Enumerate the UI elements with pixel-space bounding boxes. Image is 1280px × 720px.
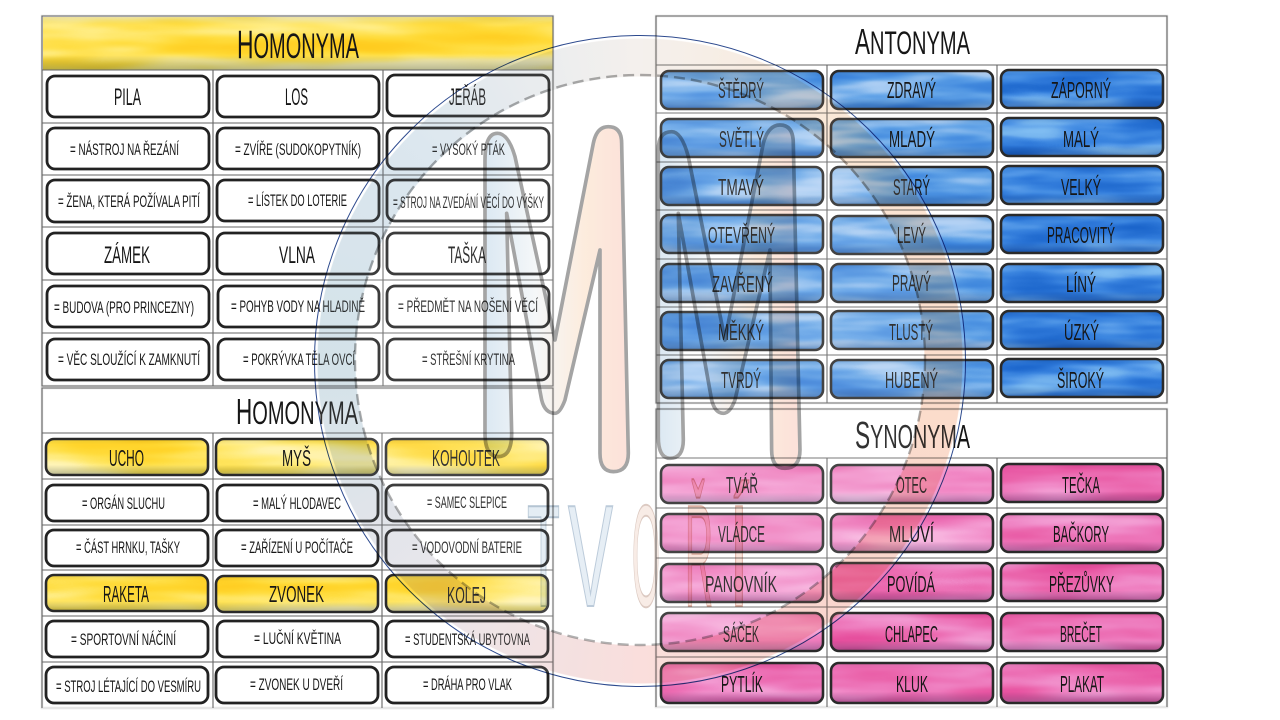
dashed inner ring — [355, 75, 925, 645]
cell: CHLAPEC: CHLAPEC — [885, 621, 938, 647]
cell: samec slepice: = SAMEC SLEPICE — [427, 493, 507, 512]
cell: ZVONEK: ZVONEK — [269, 581, 324, 607]
cell: vodovodní baterie: = VODOVODNÍ BATERIE — [412, 538, 522, 557]
cell: HUBENÝ — [831, 360, 993, 398]
cell: ZVONEK — [216, 576, 378, 612]
cell: střešní krytina: = STŘEŠNÍ KRYTINA — [422, 350, 515, 369]
logo letter M, right — [658, 125, 800, 468]
cell: ÚZKÝ — [1001, 311, 1163, 349]
cell: malý hlodavec — [217, 485, 378, 521]
cell: BAČKORY: BAČKORY — [1053, 520, 1109, 547]
cell: LOS — [217, 76, 379, 117]
cell: LÍNÝ — [1001, 264, 1163, 302]
cell: MYŠ: MYŠ — [282, 444, 311, 471]
header band: yellow watercolor — [43, 17, 553, 70]
logo word: TVOŘÍ: O — [632, 475, 660, 637]
cell: ŠTĚDRÝ: ŠTĚDRÝ — [718, 76, 764, 103]
cell: luční květina: = LUČNÍ KVĚTINA — [254, 629, 341, 648]
cell: zvíře: = ZVÍŘE (SUDOKOPYTNÍK) — [235, 140, 361, 159]
cell: MYŠ — [216, 439, 378, 475]
cell: KOHOUTEK: KOHOUTEK — [432, 445, 500, 471]
cell: TVRDÝ — [661, 360, 823, 398]
cell: OTEVŘENÝ: OTEVŘENÝ — [708, 222, 775, 248]
cell: OTEC — [831, 465, 993, 503]
cell: VELKÝ — [1001, 166, 1163, 204]
cell: luční květina — [217, 621, 378, 657]
cell: MLUVÍ: MLUVÍ — [889, 521, 934, 547]
logo word: TVOŘÍ: Í — [729, 475, 749, 637]
cell: budova — [47, 286, 209, 327]
cell: PILA: PILA — [114, 84, 141, 111]
cell: pokrývka: = POKRÝVKA TĚLA OVCÍ — [243, 350, 355, 369]
cell: dráha pro vlak: = DRÁHA PRO VLAK — [423, 675, 512, 694]
cell: ŠIROKÝ — [1001, 359, 1163, 397]
cell: stroj létající — [46, 667, 208, 703]
cell: lístek: = LÍSTEK DO LOTERIE — [248, 191, 347, 210]
cell: pohyb vody: = POHYB VODY NA HLADINĚ — [231, 297, 365, 316]
cell: vodovodní baterie — [386, 530, 548, 566]
cell: sportovní náčiní — [46, 621, 208, 657]
cell: část hrnku: = ČÁST HRNKU, TAŠKY — [76, 538, 180, 557]
cell: STARÝ: STARÝ — [893, 174, 930, 200]
panel: Antonyma — [656, 16, 1167, 403]
cell: část hrnku — [46, 530, 208, 566]
logo word: TVOŘÍ: Ř — [685, 475, 713, 637]
cell: MALÝ — [1001, 118, 1163, 156]
cell: ZDRAVÝ: ZDRAVÝ — [887, 77, 936, 103]
cell: VLNA: VLNA — [279, 242, 315, 269]
cell: TVÁŘ: TVÁŘ — [726, 472, 758, 498]
cell: TVÁŘ — [661, 465, 823, 503]
panel: Homonyma 1 — [42, 16, 553, 386]
outer circle outline — [314, 36, 966, 686]
cell: PLAKAT — [1001, 663, 1163, 703]
cell: lístek — [217, 180, 379, 221]
cell: ZAVŘENÝ: ZAVŘENÝ — [712, 271, 773, 297]
cell: ZDRAVÝ — [831, 71, 993, 109]
cell: věc sloužící — [47, 339, 209, 380]
cell: LEVÝ: LEVÝ — [897, 222, 926, 248]
cell: zvíře — [217, 128, 379, 169]
cell: zvonek u dveří — [216, 667, 378, 703]
logo word: TVOŘÍ: V — [568, 475, 613, 637]
cell: PRAVÝ: PRAVÝ — [892, 270, 931, 296]
cell: ŠTĚDRÝ — [661, 71, 823, 109]
cell: TAŠKA — [387, 233, 549, 274]
cell: vysoký pták: = VYSOKÝ PTÁK — [432, 140, 505, 159]
cell: TAŠKA: TAŠKA — [448, 241, 486, 269]
cell: stroj na zvedání — [387, 180, 549, 221]
cell: PYTLÍK — [661, 663, 823, 703]
heading: Homonyma: HOMONYMA — [237, 23, 359, 67]
cell: BREČET: BREČET — [1060, 620, 1102, 647]
cell: TVRDÝ: TVRDÝ — [721, 367, 761, 393]
cell: studentská ubytovna — [386, 621, 548, 657]
cell: MLADÝ — [831, 119, 993, 157]
cell: PANOVNÍK — [661, 564, 823, 602]
cell: střešní krytina — [387, 339, 549, 380]
cell: POVÍDÁ: POVÍDÁ — [887, 571, 935, 597]
cell: KOLEJ: KOLEJ — [447, 582, 486, 608]
cell: dráha pro vlak — [386, 667, 548, 703]
cell: PŘEZŮVKY — [1001, 563, 1163, 601]
cell: STARÝ — [831, 167, 993, 205]
cell: nástroj na řezání — [47, 128, 209, 169]
cell: RAKETA: RAKETA — [103, 581, 149, 607]
cell: TMAVÝ: TMAVÝ — [718, 174, 764, 200]
cell: TEČKA — [1001, 464, 1163, 502]
cell: ŠIROKÝ: ŠIROKÝ — [1057, 366, 1104, 393]
cell: předmět: = PŘEDMĚT NA NOŠENÍ VĚCÍ — [398, 297, 538, 316]
cell: VELKÝ: VELKÝ — [1061, 174, 1101, 200]
cell: PŘEZŮVKY: PŘEZŮVKY — [1049, 569, 1114, 597]
cell: SÁČEK — [661, 613, 823, 651]
cell: PYTLÍK: PYTLÍK — [721, 671, 763, 697]
cell: LÍNÝ: LÍNÝ — [1066, 271, 1096, 297]
watermark: circular M TVOŘÍ logo — [314, 35, 966, 687]
heading: Antonyma: ANTONYMA — [855, 21, 970, 62]
logo letter M, left — [485, 127, 628, 472]
cell: SÁČEK: SÁČEK — [723, 620, 759, 647]
cell: ZÁMEK: ZÁMEK — [104, 242, 150, 269]
cell: KOLEJ — [386, 575, 548, 612]
cell: MLUVÍ — [831, 514, 993, 552]
cell: RAKETA — [46, 575, 208, 611]
cell: budova: = BUDOVA (PRO PRINCEZNY) — [54, 298, 194, 317]
cell: orgán sluchu: = ORGÁN SLUCHU — [82, 494, 165, 513]
heading: Synonyma: SYNONYMA — [855, 415, 970, 457]
cell: ZÁMEK — [47, 233, 209, 274]
cell: ZAVŘENÝ — [661, 264, 823, 302]
panel: Homonyma 2 — [42, 388, 553, 708]
cell: SVĚTLÝ: SVĚTLÝ — [719, 126, 764, 152]
cell: LEVÝ — [831, 216, 993, 254]
cell: nástroj na řezání: = NÁSTROJ NA ŘEZÁNÍ — [70, 140, 179, 159]
panel: Synonyma — [656, 409, 1167, 707]
cell: ÚZKÝ: ÚZKÝ — [1064, 319, 1099, 345]
cell: POVÍDÁ — [831, 563, 993, 601]
cell: KLUK: KLUK — [896, 671, 928, 697]
cell: MLADÝ: MLADÝ — [889, 126, 935, 152]
cell: SVĚTLÝ — [661, 119, 823, 157]
cell: PRACOVITÝ: PRACOVITÝ — [1047, 222, 1115, 248]
cell: pokrývka — [218, 339, 379, 380]
cell: zařízení — [216, 530, 378, 566]
cell: UCHO — [46, 439, 208, 475]
cell: malý hlodavec: = MALÝ HLODAVEC — [253, 494, 341, 513]
cell: vysoký pták — [387, 128, 549, 169]
cell: věc sloužící: = VĚC SLOUŽÍCÍ K ZAMKNUTÍ — [58, 350, 200, 369]
cell: VLÁDCE — [661, 514, 823, 552]
cell: studentská ubytovna: = STUDENTSKÁ UBYTOVNA — [405, 630, 530, 649]
cell: TMAVÝ — [661, 167, 823, 205]
cell: UCHO: UCHO — [109, 445, 144, 471]
cell: ZÁPORNÝ: ZÁPORNÝ — [1051, 77, 1111, 103]
logo word: TVOŘÍ — [527, 475, 749, 637]
cell: BAČKORY — [1001, 514, 1163, 552]
cell: pohyb vody — [218, 286, 379, 327]
cell: TLUSTÝ — [831, 311, 993, 349]
cell: OTEVŘENÝ — [661, 215, 823, 253]
cell: JEŘÁB: JEŘÁB — [449, 84, 486, 111]
cell: HUBENÝ: HUBENÝ — [885, 367, 938, 393]
cell: orgán sluchu — [46, 485, 208, 521]
cell: LOS: LOS — [285, 84, 308, 111]
heading: Homonyma: HOMONYMA — [236, 391, 358, 432]
cell: MĚKKÝ — [661, 312, 823, 350]
cell: ZÁPORNÝ — [1001, 70, 1163, 108]
cell: MALÝ: MALÝ — [1063, 126, 1099, 152]
cell: PILA — [47, 76, 209, 117]
cell: TEČKA: TEČKA — [1062, 471, 1100, 498]
logo word: TVOŘÍ: T — [527, 475, 560, 637]
cell: PRACOVITÝ — [1001, 215, 1163, 253]
cell: TLUSTÝ: TLUSTÝ — [889, 319, 933, 345]
cell: OTEC: OTEC — [896, 472, 927, 498]
cell: stroj létající: = STROJ LÉTAJÍCÍ DO VESMÍRU — [56, 677, 201, 696]
cell: MĚKKÝ: MĚKKÝ — [718, 319, 764, 345]
cell: VLNA — [217, 233, 379, 274]
cell: KOHOUTEK — [386, 439, 548, 475]
cell: zařízení: = ZAŘÍZENÍ U POČÍTAČE — [241, 538, 353, 557]
cell: VLÁDCE: VLÁDCE — [718, 521, 765, 547]
cell: PANOVNÍK: PANOVNÍK — [705, 571, 777, 597]
cell: samec slepice — [386, 485, 548, 521]
cell: předmět — [387, 286, 549, 327]
cell: BREČET — [1001, 613, 1163, 651]
cell: žena — [47, 180, 209, 222]
cell: žena: = ŽENA, KTERÁ POŽÍVALA PITÍ — [58, 192, 200, 211]
panel: Homonyma 1: = STROJ NA ZVEDÁNÍ VĚCÍ DO VÝŠKY — [393, 193, 544, 212]
cell: PRAVÝ — [831, 264, 993, 302]
cell: sportovní náčiní: = SPORTOVNÍ NÁČINÍ — [71, 630, 176, 649]
cell: PLAKAT: PLAKAT — [1060, 671, 1104, 697]
cell: CHLAPEC — [831, 613, 993, 651]
cell: KLUK — [831, 663, 993, 703]
cell: zvonek u dveří: = ZVONEK U DVEŘÍ — [250, 675, 343, 694]
cell: JEŘÁB — [387, 75, 549, 116]
